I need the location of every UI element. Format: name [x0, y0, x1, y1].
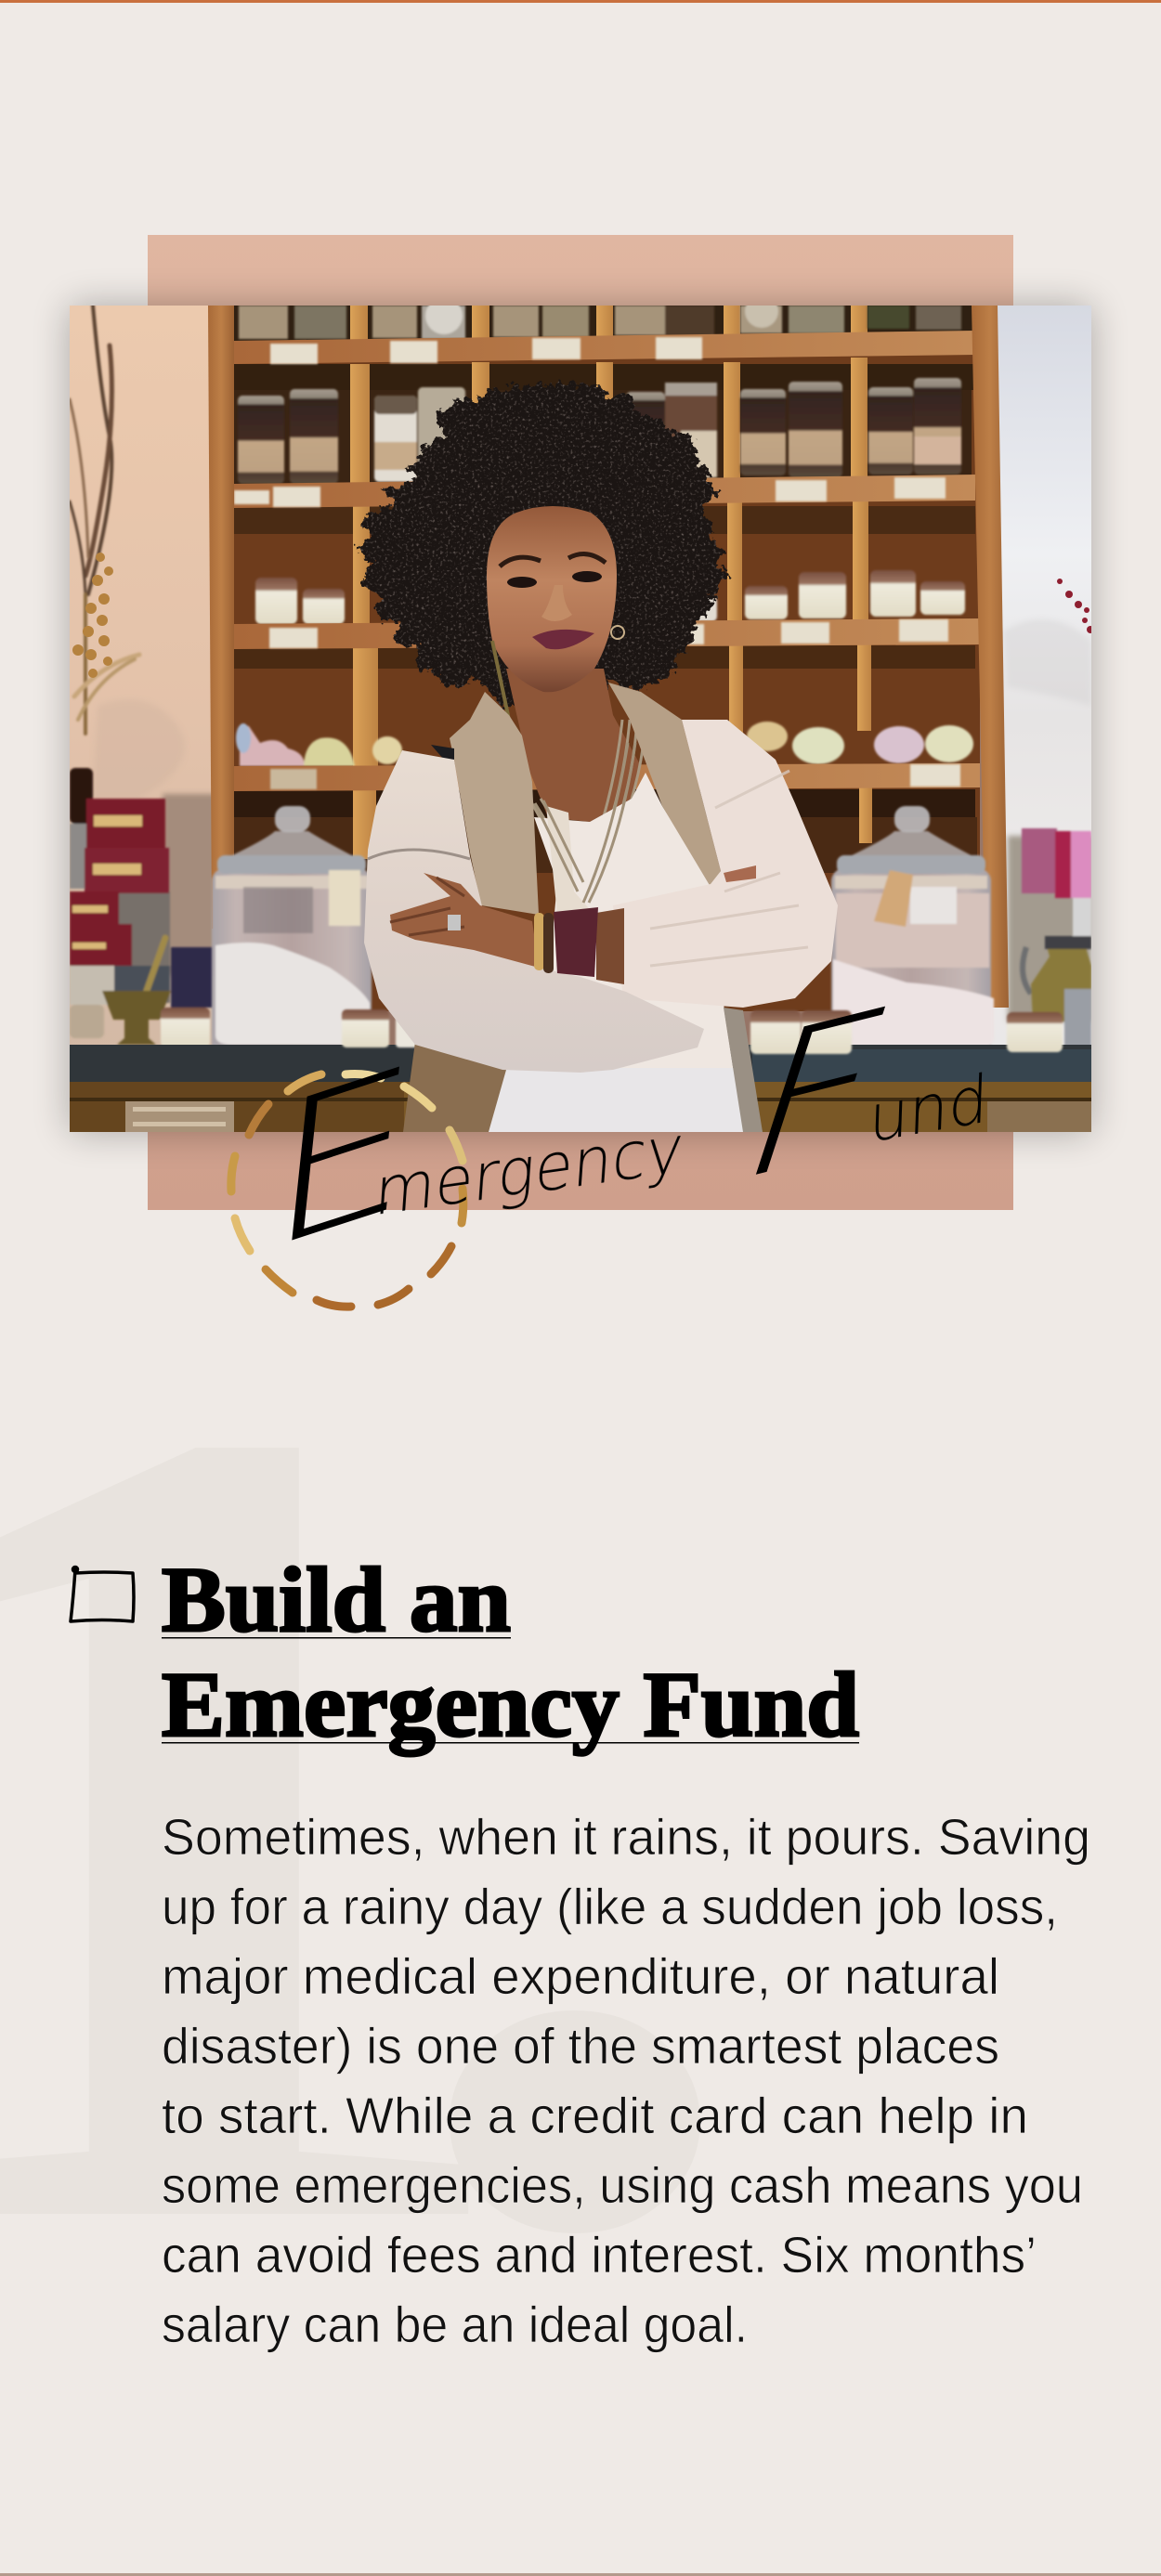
plant seed beads [72, 553, 113, 678]
horizontal shelf boards [234, 331, 980, 791]
vest lower right [724, 1008, 763, 1132]
script title: Emergency Fund: E [260, 1021, 425, 1296]
large background numeral [0, 989, 768, 2512]
sleeve on viewer's left [364, 750, 704, 1073]
heading underlines [162, 1637, 859, 1744]
stacked red tins and shop items [70, 768, 214, 1047]
bottom border line [0, 2573, 1161, 2576]
script title: Emergency Fund: mergency [372, 1110, 685, 1230]
second row jars [238, 378, 961, 484]
hand behind arm [724, 865, 756, 882]
placket and buttons [546, 806, 594, 915]
body paragraph: to start. While a credit card can help in [162, 2087, 1028, 2144]
face [487, 506, 617, 692]
soaps on fourth row [236, 722, 973, 766]
heading: Build an Emergency Fund: Emergency Fund [162, 1653, 859, 1756]
wooden shelf unit [208, 294, 1009, 1011]
body paragraph: disaster) is one of the smartest places [162, 2017, 999, 2075]
wall details [93, 619, 1091, 1021]
top border line [0, 0, 1161, 3]
blouse centre [488, 773, 743, 1132]
vertical dividers [350, 306, 872, 859]
photo drop shadow [70, 306, 1091, 1132]
bracelets [534, 907, 598, 977]
body paragraph: up for a rainy day (like a sudden job loss, [162, 1878, 1058, 1935]
vest left panel [450, 692, 539, 915]
body paragraph: some emergencies, using cash means you [162, 2156, 1083, 2214]
eyebrows, eyes, nose and lips [492, 554, 624, 720]
hair [357, 382, 729, 706]
gold dashed circle [231, 1073, 463, 1307]
woman [357, 382, 838, 1132]
script title: Emergency Fund: F [713, 961, 917, 1229]
third row small jars [255, 570, 965, 624]
large background numeral: . [382, 989, 768, 2512]
right glass jar of salt [831, 806, 994, 1059]
checkbox icon [71, 1568, 134, 1621]
left glass jar of salt [212, 806, 372, 1059]
shelf posts [208, 306, 234, 929]
dried plant [70, 306, 139, 734]
shelf back panels [228, 306, 980, 1011]
crossed forearm skin [596, 908, 624, 984]
hand with ring [390, 873, 539, 968]
panel: tan backing rectangle [148, 235, 1013, 1210]
sleeve on viewer's right [613, 720, 838, 1008]
body paragraph: Sometimes, when it rains, it pours. Saving [162, 1808, 1090, 1866]
shoulder strap [431, 745, 454, 763]
script title: Emergency Fund: und [867, 1060, 989, 1158]
candles on counter [342, 1009, 1063, 1054]
necklace cords [529, 720, 645, 903]
body paragraph: salary can be an ideal goal. [162, 2296, 748, 2353]
body paragraph [162, 1808, 1090, 2353]
heading: Build an Emergency Fund [162, 1548, 859, 1756]
pink boxes, teapot and crystal [1022, 828, 1091, 1052]
neck and chest [506, 669, 641, 822]
right wall [990, 306, 1091, 1045]
left wall [70, 306, 214, 1045]
necklace lower cords [535, 743, 635, 903]
shelf tags [234, 337, 960, 789]
top row jars [238, 306, 962, 340]
red berries [1057, 579, 1094, 633]
script title: Emergency Fund [260, 961, 989, 1296]
vest lower left [403, 1042, 506, 1132]
counter with drawers [70, 1009, 1091, 1132]
heading: Build an Emergency Fund: Build an [162, 1548, 511, 1651]
body paragraph: can avoid fees and interest. Six months’ [162, 2226, 1037, 2283]
vest right panel [608, 683, 721, 887]
photo: woman in front of apothecary shelves [70, 294, 1094, 1132]
body paragraph: major medical expenditure, or natural [162, 1947, 999, 2005]
